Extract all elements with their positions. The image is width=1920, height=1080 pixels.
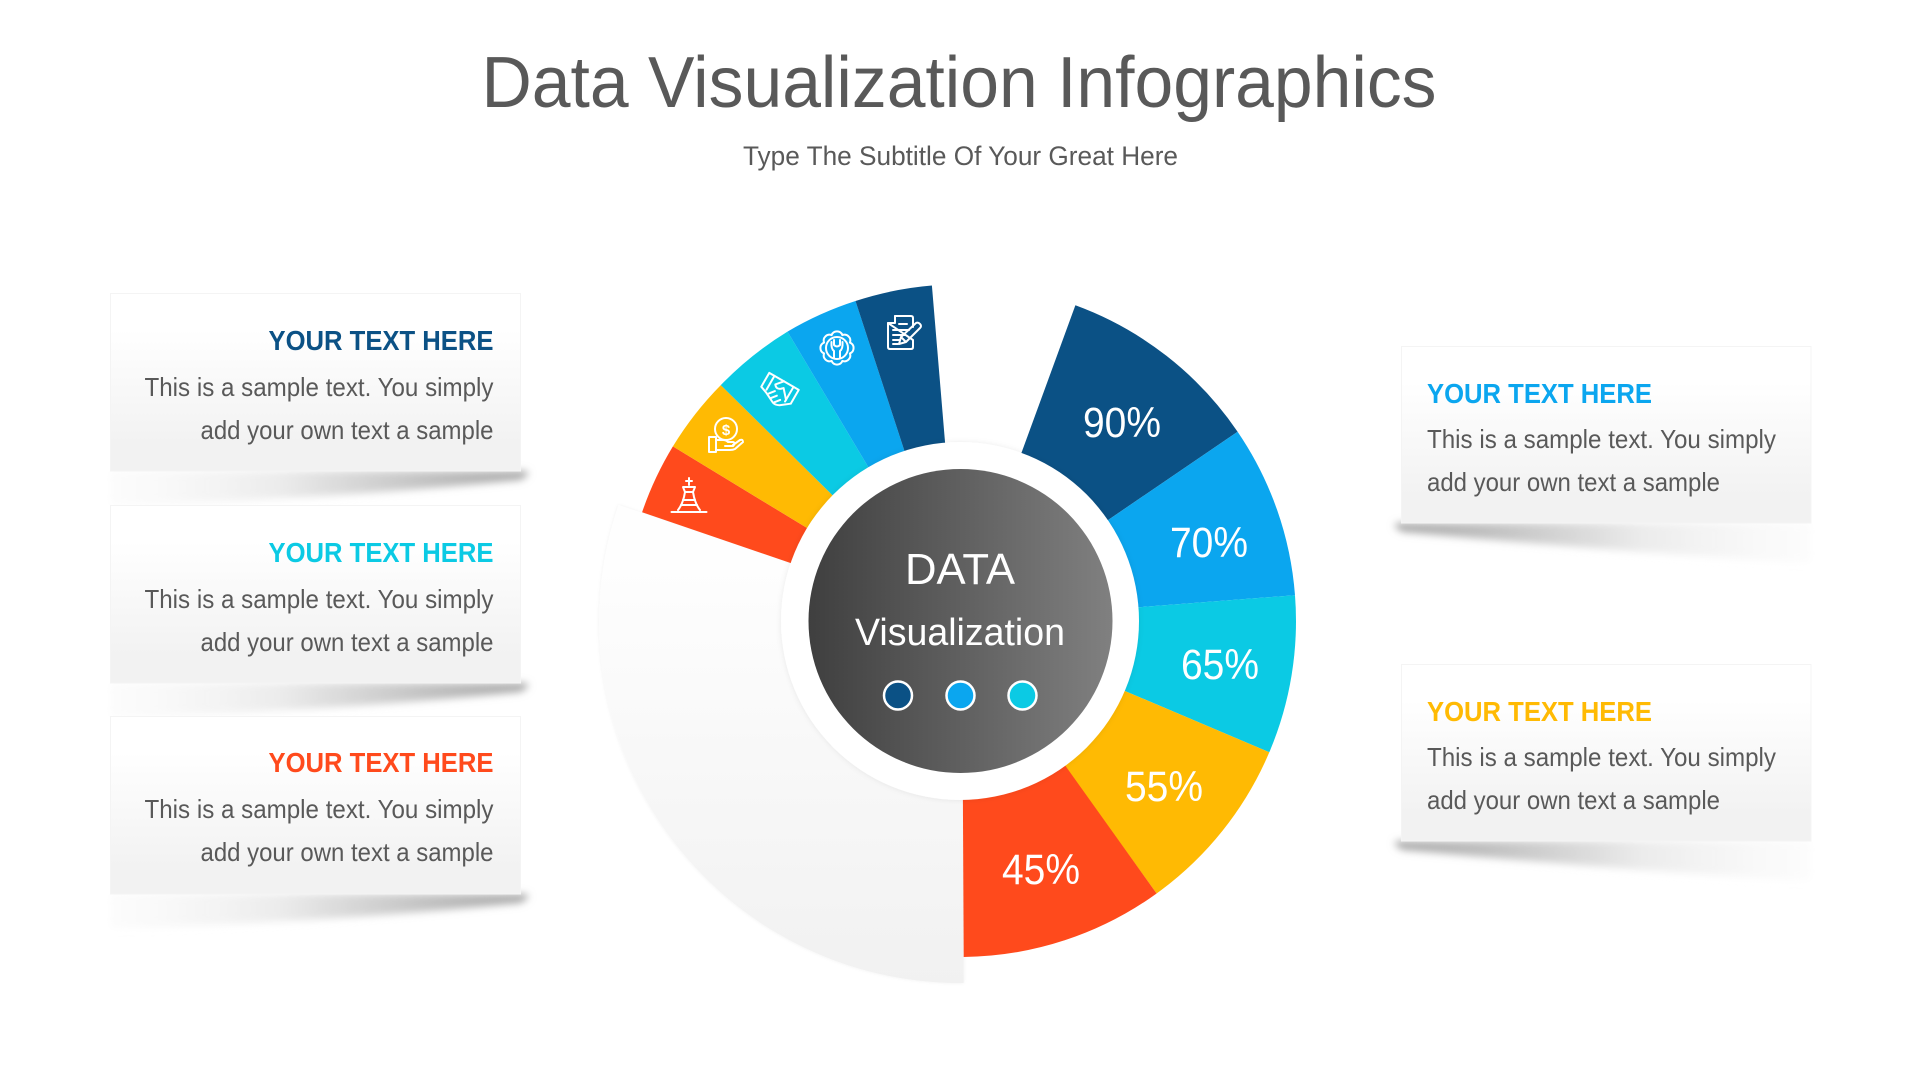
white ring — [781, 442, 1139, 800]
heading: YOUR TEXT HERE — [268, 325, 494, 356]
body text: This is a sample text. You simply — [1427, 742, 1776, 772]
sector 65% — [960, 595, 1296, 752]
body text: This is a sample text. You simply — [144, 584, 494, 614]
icon: hand holding coin — [709, 418, 743, 452]
body text: This is a sample text. You simply — [144, 794, 494, 824]
body text — [144, 794, 494, 867]
icon: document and pencil — [888, 316, 921, 349]
sector 45% — [962, 621, 1157, 957]
value 65%: 65% — [1181, 641, 1259, 689]
body text — [1427, 742, 1776, 815]
body text: add your own text a sample — [200, 837, 494, 867]
panel: right card blue — [1395, 346, 1811, 562]
indicator dots — [884, 682, 1036, 710]
panel: right card yellow — [1395, 664, 1811, 880]
body text: add your own text a sample — [1427, 467, 1720, 497]
icon: handshake — [757, 373, 799, 411]
sector 55% — [960, 621, 1269, 894]
body text: add your own text a sample — [200, 627, 494, 657]
body text: add your own text a sample — [1427, 785, 1720, 815]
sector 90% — [960, 305, 1238, 621]
panel: left card navy — [110, 294, 528, 505]
icon: hand holding coin: $ — [722, 422, 731, 439]
value 45%: 45% — [1002, 846, 1080, 894]
heading: YOUR TEXT HERE — [1427, 696, 1652, 727]
title: Data Visualization Infographics — [482, 43, 1436, 123]
subtitle: Type The Subtitle Of Your Great Here — [743, 141, 1178, 171]
value 70%: 70% — [1170, 519, 1248, 567]
body text: This is a sample text. You simply — [1427, 424, 1776, 454]
dark centre circle — [808, 469, 1112, 773]
icon sector blue — [788, 301, 960, 621]
body text — [144, 584, 494, 657]
centre label DATA: DATA — [905, 545, 1016, 594]
centre label Visualization: Visualization — [855, 612, 1065, 654]
icon: chess piece — [672, 478, 706, 512]
panel: left card cyan — [110, 506, 528, 717]
icon sector cyan — [721, 332, 960, 621]
icon sector navy — [856, 286, 960, 621]
sector 70% — [960, 432, 1295, 621]
body text: add your own text a sample — [200, 415, 494, 445]
icon: gear with wrench — [820, 331, 854, 365]
heading: YOUR TEXT HERE — [268, 537, 494, 568]
heading: YOUR TEXT HERE — [1427, 378, 1652, 409]
heading: YOUR TEXT HERE — [268, 747, 494, 778]
body text — [1427, 424, 1776, 497]
panel: left card red — [110, 716, 528, 928]
grey remainder sector — [599, 505, 964, 983]
value 55%: 55% — [1125, 763, 1203, 811]
icon sector yellow — [673, 385, 960, 621]
body text — [144, 372, 494, 445]
donut chart — [599, 286, 1296, 983]
icon sector red — [642, 446, 960, 621]
value 90%: 90% — [1083, 399, 1161, 447]
body text: This is a sample text. You simply — [144, 372, 494, 402]
